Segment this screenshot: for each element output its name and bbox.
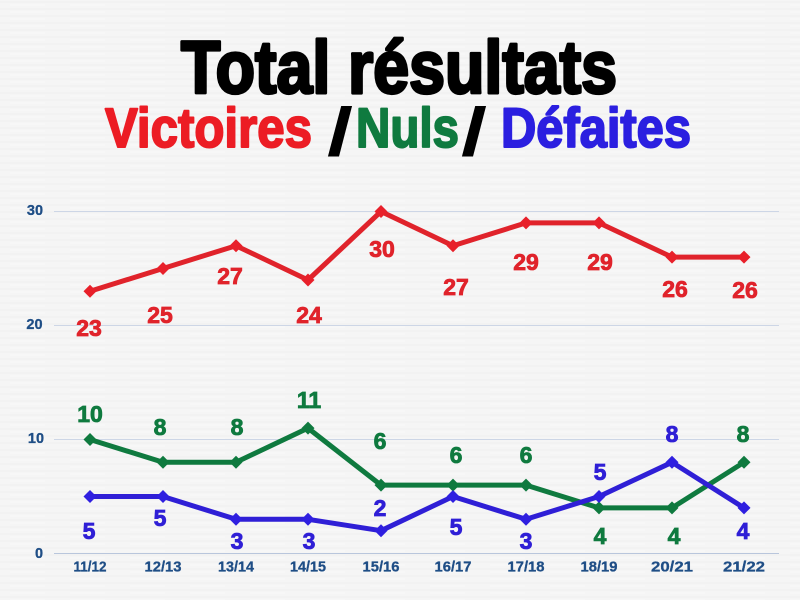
x axis labels: 12/13 bbox=[144, 560, 182, 576]
series: Victoires (red) bbox=[76, 205, 758, 341]
values: Nuls: 10 bbox=[77, 401, 103, 427]
values: Victoires bbox=[76, 236, 758, 341]
y axis labels: 30 bbox=[27, 203, 43, 219]
values: Victoires: 24 bbox=[296, 302, 322, 328]
title: Total résultats bbox=[181, 26, 617, 109]
values: Nuls: 8 bbox=[231, 414, 244, 440]
values: Nuls: 8 bbox=[737, 421, 750, 447]
values: Victoires: 26 bbox=[732, 277, 758, 303]
x axis labels: 14/15 bbox=[290, 560, 326, 576]
values: Victoires: 27 bbox=[217, 263, 243, 289]
values: Défaites: 2 bbox=[374, 495, 386, 521]
x axis labels: 16/17 bbox=[434, 560, 472, 576]
subtitle word: Victoires: Victoires bbox=[105, 96, 312, 159]
values: Nuls: 11 bbox=[297, 387, 321, 413]
x axis labels: 11/12 bbox=[74, 560, 106, 576]
values: Nuls: 6 bbox=[374, 428, 386, 454]
series: Nuls (green) bbox=[77, 387, 750, 549]
values: Défaites: 3 bbox=[520, 528, 532, 554]
subtitle slash: / bbox=[461, 94, 487, 170]
x axis labels: 20/21 bbox=[651, 560, 693, 576]
values: Défaites: 4 bbox=[737, 518, 750, 544]
y axis labels: 20 bbox=[26, 317, 43, 333]
values: Victoires: 29 bbox=[513, 249, 539, 275]
values: Victoires: 25 bbox=[147, 302, 173, 328]
values: Défaites: 5 bbox=[154, 505, 167, 531]
values: Victoires: 26 bbox=[662, 276, 688, 302]
values: Nuls: 4 bbox=[594, 523, 607, 549]
values: Nuls bbox=[77, 387, 750, 549]
x axis labels: 21/22 bbox=[723, 560, 765, 576]
line chart bbox=[26, 203, 779, 576]
subtitle slash: / bbox=[327, 94, 353, 170]
values: Défaites: 3 bbox=[231, 528, 243, 554]
values: Victoires: 23 bbox=[76, 315, 102, 341]
values: Victoires: 27 bbox=[443, 274, 469, 300]
y axis labels bbox=[26, 203, 44, 562]
values: Défaites: 3 bbox=[303, 528, 315, 554]
x axis labels: 17/18 bbox=[508, 560, 544, 576]
values: Victoires: 30 bbox=[369, 236, 395, 262]
values: Défaites bbox=[83, 421, 750, 554]
values: Nuls: 6 bbox=[450, 442, 462, 468]
values: Nuls: 4 bbox=[668, 523, 681, 549]
series: Défaites (blue) bbox=[83, 421, 750, 554]
x axis labels bbox=[74, 560, 765, 576]
y axis labels: 10 bbox=[28, 431, 44, 447]
x axis labels: 15/16 bbox=[362, 560, 400, 576]
x axis labels: 13/14 bbox=[218, 560, 254, 576]
values: Victoires: 29 bbox=[587, 249, 613, 275]
values: Nuls: 8 bbox=[154, 414, 167, 440]
subtitle: Victoires / Nuls / Défaites bbox=[105, 94, 691, 170]
values: Défaites: 5 bbox=[450, 514, 463, 540]
subtitle word: Nuls: Nuls bbox=[356, 96, 459, 159]
subtitle word: Défaites: Défaites bbox=[501, 96, 691, 159]
y axis labels: 0 bbox=[35, 546, 43, 562]
x axis labels: 18/19 bbox=[580, 560, 618, 576]
values: Défaites: 5 bbox=[83, 518, 96, 544]
values: Défaites: 8 bbox=[666, 421, 679, 447]
values: Défaites: 5 bbox=[594, 459, 607, 485]
values: Nuls: 6 bbox=[520, 442, 532, 468]
